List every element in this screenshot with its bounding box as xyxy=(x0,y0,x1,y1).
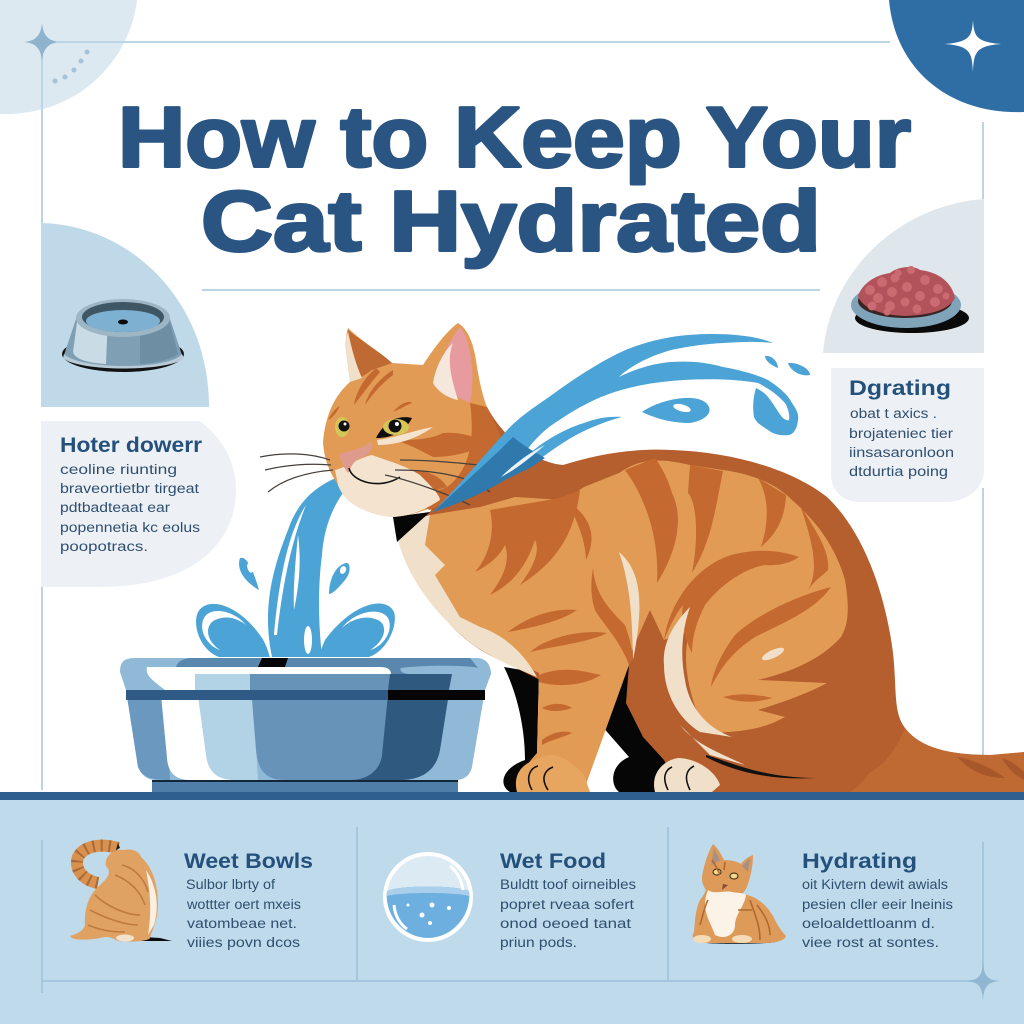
panel: left text block: ceoline riunting xyxy=(60,462,177,477)
bottom panel dividers xyxy=(42,827,983,993)
small cat from behind xyxy=(70,843,172,942)
top-right decorative corner xyxy=(889,0,1024,112)
title divider xyxy=(202,289,820,291)
panel: left text block: Hoter dowerr xyxy=(60,434,202,457)
cat tail stripes xyxy=(958,757,1024,780)
bottom panel background xyxy=(0,800,1024,1024)
item: Hydrating: viee rost at sontes. xyxy=(802,935,939,950)
title xyxy=(118,90,911,270)
panel: wet food icon xyxy=(823,199,984,353)
cat cream markings xyxy=(395,515,745,765)
water stream from mouth xyxy=(268,473,352,657)
item: Hydrating: oeloaldettloanm d. xyxy=(802,916,935,931)
panel: right text block: obat t axics . xyxy=(850,406,937,421)
cat ear details xyxy=(348,330,392,378)
panel: left text block: braveortietbr tirgeat xyxy=(60,481,199,496)
item: Wet Food: Wet Food xyxy=(500,850,606,873)
cat whiskers xyxy=(260,454,490,505)
cat head xyxy=(323,323,490,517)
top-left decorative corner xyxy=(0,0,983,790)
cat muzzle and chin xyxy=(335,427,440,517)
cat eyes xyxy=(335,417,412,438)
title: How to Keep Your xyxy=(118,90,911,186)
item: Wet Food: Buldtt toof oirneibles xyxy=(500,877,636,892)
cat light coat xyxy=(425,460,848,792)
item: Wet Food: onod oeoed tanat xyxy=(500,916,631,931)
panel: right text block: brojateniec tier xyxy=(849,426,954,441)
cat body xyxy=(395,407,1024,792)
item: Wet Food xyxy=(383,850,636,950)
cat paws xyxy=(516,755,590,792)
item: Hydrating xyxy=(693,844,953,950)
cat black legs xyxy=(503,665,700,792)
item: Weet Bowls: vatombeae net. xyxy=(187,916,297,931)
cat haunch xyxy=(664,551,831,702)
cat neck shading xyxy=(410,403,505,510)
panel: left text block xyxy=(41,421,236,587)
water splash at bowl xyxy=(196,558,395,657)
cat xyxy=(260,323,1024,792)
panel: left text block: popennetia kc eolus xyxy=(60,520,200,535)
cat head shading xyxy=(328,368,473,502)
panel: right text block xyxy=(831,368,984,502)
panel: left text block: pdtbadteaat ear xyxy=(60,500,171,515)
item: Weet Bowls: Weet Bowls xyxy=(184,850,313,873)
cat nose and mouth xyxy=(340,441,400,484)
panel: right text block: dtdurtia poing xyxy=(849,464,948,479)
water globe icon xyxy=(383,852,473,942)
title: Cat Hydrated xyxy=(201,174,821,270)
item: Weet Bowls: viiies povn dcos xyxy=(187,935,300,950)
item: Wet Food: popret rveaa sofert xyxy=(500,897,634,912)
item: Weet Bowls: wottter oert mxeis xyxy=(186,897,301,912)
item: Hydrating: pesien cller eeir lneinis xyxy=(802,897,953,912)
water arc across cat's back xyxy=(433,334,810,512)
item: Weet Bowls: Sulbor lbrty of xyxy=(186,877,275,892)
sparkle bottom right xyxy=(966,962,1000,1000)
small sitting cat xyxy=(693,844,786,944)
item: Weet Bowls xyxy=(70,843,313,950)
water bowl xyxy=(120,658,491,792)
panel: right text block: Dgrating xyxy=(849,377,951,400)
panel: water bowl icon xyxy=(41,223,209,407)
panel: right text block: iinsasaronloon xyxy=(849,445,954,460)
ground bar xyxy=(0,792,1024,800)
item: Wet Food: priun pods. xyxy=(500,935,577,950)
water over cat overlap xyxy=(433,437,545,512)
item: Hydrating: Hydrating xyxy=(802,850,917,873)
cat collar xyxy=(393,512,430,542)
cat tail xyxy=(850,728,1024,792)
item: Hydrating: oit Kivtern dewit awials xyxy=(802,877,948,892)
cat stripes xyxy=(475,458,828,745)
panel: left text block: poopotracs. xyxy=(60,539,148,554)
